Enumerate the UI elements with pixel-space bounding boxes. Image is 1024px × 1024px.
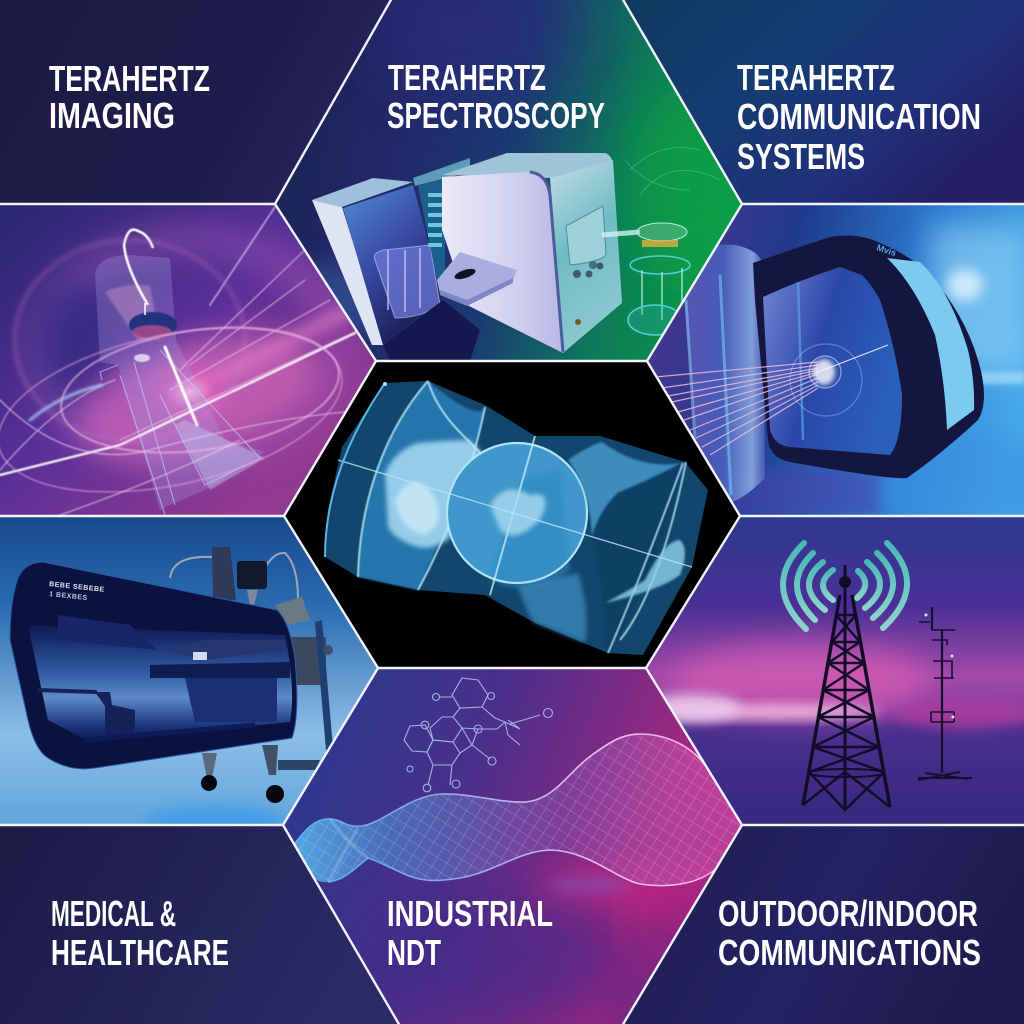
heading: outdoor/indoor communications <box>718 893 981 973</box>
panel: outdoor/indoor communications heading <box>620 820 1024 1024</box>
heading: terahertz communication systems: SYSTEMS <box>737 136 865 177</box>
icon: spectrometer instrument <box>312 153 622 361</box>
icon: scanner stand and arms <box>170 547 333 803</box>
heading: medical and healthcare: HEALTHCARE <box>51 932 229 973</box>
heading: terahertz spectroscopy: TERAHERTZ <box>388 57 546 98</box>
icon: dark D-shaped housing <box>753 235 984 478</box>
icon: molecule diagram <box>404 678 552 792</box>
icon: light beams and rings <box>0 207 370 520</box>
panel: industrial NDT <box>280 665 750 1024</box>
heading: terahertz imaging: IMAGING <box>49 95 175 136</box>
heading: terahertz spectroscopy: SPECTROSCOPY <box>387 95 605 136</box>
panel: communication receiver device <box>640 200 1024 530</box>
heading: terahertz spectroscopy <box>387 57 605 136</box>
icon: transparent cylinder <box>680 245 765 503</box>
heading: terahertz imaging: TERAHERTZ <box>49 58 210 99</box>
icon: lattice radio tower <box>803 565 890 810</box>
icon: small antenna mast <box>918 607 972 780</box>
icon: curved display with machine view: BEBE SEBEBE <box>49 581 105 594</box>
heading: terahertz imaging <box>49 58 210 136</box>
heading: industrial NDT: INDUSTRIAL <box>387 893 553 934</box>
icon: curved display with machine view <box>10 562 297 769</box>
icon: translucent blue scan <box>325 381 708 655</box>
chart: wave mesh <box>292 734 745 886</box>
heading: medical and healthcare <box>51 893 229 973</box>
icon: converging terahertz rays <box>655 344 888 455</box>
panel: terahertz spectroscopy <box>270 0 770 365</box>
panel: imaging optical beams <box>0 200 380 520</box>
icon: signal waves <box>783 543 907 629</box>
icon: glass cylinder and slide <box>95 230 265 515</box>
panel: center terahertz scan image <box>324 380 708 655</box>
icon: beam focus glow <box>813 359 835 385</box>
panel: terahertz imaging heading <box>0 0 400 210</box>
panel: outdoor tower scene <box>640 510 1024 830</box>
panel: terahertz communication systems heading <box>620 0 1024 210</box>
panel: medical and healthcare heading <box>0 820 405 1024</box>
heading: medical and healthcare: MEDICAL & <box>51 893 176 934</box>
heading: terahertz communication systems <box>737 57 981 177</box>
panel: medical scanner <box>0 510 385 835</box>
icon: curved display with machine view: 1 BEXBES <box>49 591 88 602</box>
icon: dark D-shaped housing: Mvis <box>875 242 898 258</box>
heading: terahertz communication systems: TERAHERTZ <box>737 57 895 98</box>
heading: industrial NDT: NDT <box>387 932 441 973</box>
icon: glass sample holder <box>602 148 720 335</box>
heading: industrial NDT <box>387 893 553 973</box>
